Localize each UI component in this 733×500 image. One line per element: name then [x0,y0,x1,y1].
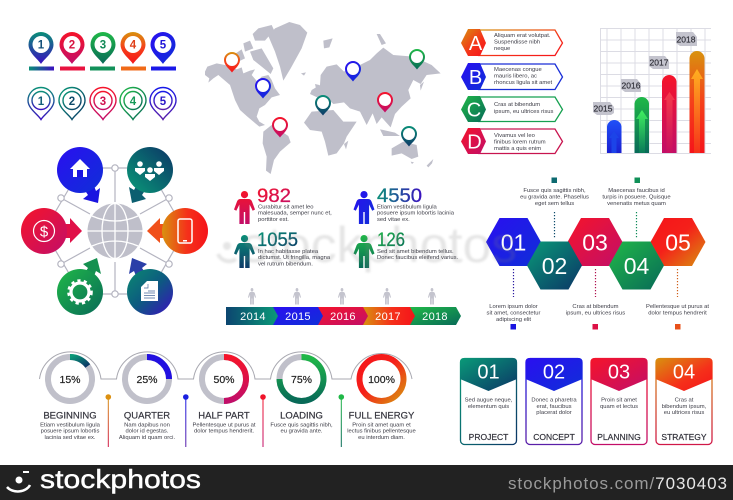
card 03: 03 [608,362,630,384]
card 03: Proin sit amet [601,398,637,404]
outline pin 2: 2 [69,96,75,108]
donut 25% [119,357,175,441]
donut 75%: 75% [291,374,312,386]
outline pin 5: 5 [160,96,167,108]
donut 75% [270,357,333,434]
donut 15%: BEGINNING [43,410,97,422]
donut 25%: Aliquam id quam orci. [119,435,175,441]
bar 2016 [634,97,649,153]
connector network [44,165,185,297]
year labels [594,34,696,114]
outline pin 1: 1 [38,96,45,108]
step captions top: venenatis metus quam [607,201,666,207]
option A: Aliquam erat volutpat. [494,33,551,39]
footer logo text: stockphotos [40,464,201,494]
outline pin 3 [90,88,116,120]
year labels: 2016 [622,80,641,90]
filled number pins [28,32,176,70]
step captions bottom: sit amet, consectetur [487,310,541,316]
step captions top: turpis in posuere. Quisque [602,194,671,200]
progress donuts [40,352,416,447]
stat 4550: posuere ipsum lobortis lacinia [377,210,455,216]
donut 100%: 100% [368,374,395,386]
map pin teal [315,95,331,116]
stat 982: Curabitur sit amet leo [258,204,314,210]
map pin green [409,49,425,70]
hexagon process [486,178,709,330]
donut 25%: Nam dapibus non [124,422,170,428]
bar 2018 [690,51,704,153]
icon circle: dollar: $ [40,224,49,240]
stat 4550 [354,186,455,224]
option D: Vivamus vel leo [494,133,535,139]
donut 50%: dolor tempus hendrerit. [194,428,254,434]
donut 25%: dolor id egestas. [126,428,169,434]
step captions top [520,188,671,207]
step 04 [609,242,664,290]
pin 5: 5 [160,40,167,52]
pin 2: 2 [69,40,75,52]
step captions bottom: dolor tempus hendrerit [648,310,707,316]
globe [88,204,142,258]
card 03: quam et lectus [600,404,638,410]
map pin red [272,117,288,138]
card 04: bibendum ipsum, [662,404,707,410]
option D: mattis a quis enim [494,146,541,152]
arrow 2015 [273,307,323,325]
icon circle: house [57,147,103,193]
card 02: Donec a pharetra [531,398,577,404]
card 02 [526,358,582,444]
footer logo icon [7,471,30,491]
card 01 [460,358,517,444]
donut 15%: posuere ipsum lobortis [41,428,99,434]
step 03: 03 [582,230,608,256]
option A: Suspendisse nibh [494,40,540,46]
stat 982: 982 [257,186,291,207]
stat 982: malesuada, semper nunc et, [258,210,332,216]
pin 1: 1 [38,40,45,52]
stat 1055: vel rutrum bibendum. [258,262,313,268]
step captions top: Maecenas faucibus id [608,188,665,194]
card 02: placerat dolor [536,410,572,416]
icon circle: gear [57,269,103,315]
arrow 2014: 2014 [240,311,266,323]
donut 15% [40,357,101,441]
people stats [234,186,459,268]
map pin blue 2 [345,61,361,82]
pin markers [106,394,344,447]
option D [461,128,562,154]
donut 50%: 50% [213,374,235,386]
option D: D [467,132,482,154]
hub diagram [21,147,208,315]
donut 15%: Etiam vestibulum ligula [40,422,101,428]
world map [205,22,441,174]
step 04: 04 [624,253,649,279]
donut 50%: Pellentesque ut purus at [192,422,256,428]
stat 4550: Etiam vestibulum ligula [377,204,438,210]
step markers [510,178,680,330]
stat 126 [354,230,459,268]
card 02: erat, faucibus [536,404,572,410]
footer url: stockphotos.com/7030403 [508,474,727,493]
arrow 2017: 2017 [375,311,401,323]
outline pin 2 [59,88,85,120]
bar 2017 [662,75,676,153]
bar 2015 [607,120,622,153]
outline pin 5 [150,88,176,120]
step 01 [486,218,541,266]
pin 1 [28,32,54,70]
donut 75%: Fusce quis sagittis nibh, [270,422,333,428]
bar chart [593,28,711,154]
outline pin 1 [28,88,54,120]
pin 4: 4 [130,40,137,52]
stat 1055 [234,230,331,268]
donut 100%: lectus finibus pellentesque [347,428,416,434]
step 05: 05 [665,230,691,256]
donut 15%: 15% [59,374,81,386]
year labels: 2018 [677,34,696,44]
step 05 [650,218,706,266]
step captions bottom: Cras at bibendum [572,304,619,310]
donut 75%: LOADING [280,410,323,422]
outline pin 4: 4 [130,96,137,108]
option B: Maecenas congue [494,67,542,73]
donut 50%: HALF PART [198,410,250,422]
card 01: elementum quis [468,404,509,410]
info cards [460,358,712,444]
stat 126: Sed sit amet bibendum tellus. [377,249,454,255]
donut 15%: lacinia sed vitae ex. [44,435,96,441]
card 04: STRATEGY [661,432,707,442]
pin 3 [90,32,116,70]
option B: mauris libero, ac [494,74,537,80]
arrow 2015: 2015 [285,311,311,323]
step captions bottom: Lorem ipsum dolor [489,304,538,310]
year labels: 2017 [650,58,669,68]
step 01: 01 [501,230,526,256]
donut 25%: 25% [136,374,158,386]
year labels: 2015 [594,104,613,114]
map pin teal 2 [401,126,417,146]
connecting arcs [40,352,412,379]
outline pin 3: 3 [100,96,106,108]
donut 100%: FULL ENERGY [349,410,415,422]
donut 25%: QUARTER [124,410,170,422]
pin 3: 3 [100,40,106,52]
option B: B [469,67,482,89]
icon circle: team [127,147,173,193]
map pin orange [224,52,240,72]
card 04: eu ultrices risus [664,410,704,416]
card 03 [590,358,648,444]
step captions bottom: Pellentesque ut purus at [646,304,709,310]
donut 100% [347,357,416,441]
card 01: Sed augue neque, [465,398,513,404]
arrow 2016: 2016 [330,311,356,323]
year timeline [226,288,461,325]
option labels A-D [461,29,562,154]
arrow 2018: 2018 [422,311,448,323]
pin 4 [120,32,146,70]
map pins [224,49,425,146]
card 04: Cras at [675,398,694,404]
dotted leaders [514,212,678,297]
icon circle: document [127,269,173,315]
donut 50% [192,357,256,434]
pin 5 [150,32,176,70]
step captions top: eu gravida ante. Phasellus [520,194,589,200]
map pin blue [255,78,271,98]
stat 1055: In hac habitasse platea [258,249,319,255]
footer bar [0,464,733,500]
card 01: 01 [477,362,500,384]
option C [461,96,562,122]
step 02 [527,242,582,290]
stat 126: Donec faucibus eleifend varius. [377,255,459,261]
stat 1055: 1055 [257,230,298,251]
card 04 [656,358,712,444]
option A: A [469,33,483,55]
card 02: CONCEPT [533,432,575,442]
donut 100%: Proin sit amet quam et [352,422,411,428]
step captions bottom [487,304,709,323]
step 02: 02 [542,253,567,279]
step captions bottom: ipsum, eu ultrices risus [566,310,625,316]
stat 4550: 4550 [377,186,422,207]
outline pin 4 [120,88,146,120]
stat 982: porttitor est. [258,217,289,223]
option C: C [467,100,481,122]
arrow 2016 [318,307,368,325]
card 02: 02 [543,362,565,384]
option A [461,29,562,56]
timeline people [248,288,436,304]
stat 1055: dictumst. Ut fringilla, magna [258,255,331,261]
step 03 [568,218,622,266]
watermark: stockphotos [242,217,517,273]
option C: ipsum, eu ultrices risus [494,109,554,115]
card 01: PROJECT [469,432,508,442]
arrow 2014 [226,307,278,325]
card 03: PLANNING [597,432,641,442]
hub arrows [60,176,170,286]
option A: neque [494,46,510,52]
step captions top: Fusce quis sagittis nibh, [523,188,586,194]
donut 100%: eu interdum diam. [358,435,405,441]
option D: finibus lorem rutrum [494,140,546,146]
card 04: 04 [673,362,695,384]
step captions top: eget sem tellus [535,201,574,207]
icon circle: phone [162,208,208,254]
option C: Cras at bibendum [494,102,540,108]
arrow 2017 [363,307,415,325]
pin 2 [60,32,85,70]
donut 75%: eu gravida ante. [281,428,323,434]
chart grid [600,28,711,154]
option B [461,63,562,90]
stat 126: 126 [377,230,405,251]
outline number pins [28,88,176,120]
option B: rhoncus ligula sit amet [494,80,553,86]
icon circle: dollar [21,208,67,254]
stat 982 [234,186,332,224]
map pin crimson [377,92,393,112]
arrow 2018 [410,307,461,325]
year tags [593,32,697,115]
step captions bottom: adipiscing elit [496,317,531,323]
stat 4550: sed vitae ex. [377,217,410,223]
